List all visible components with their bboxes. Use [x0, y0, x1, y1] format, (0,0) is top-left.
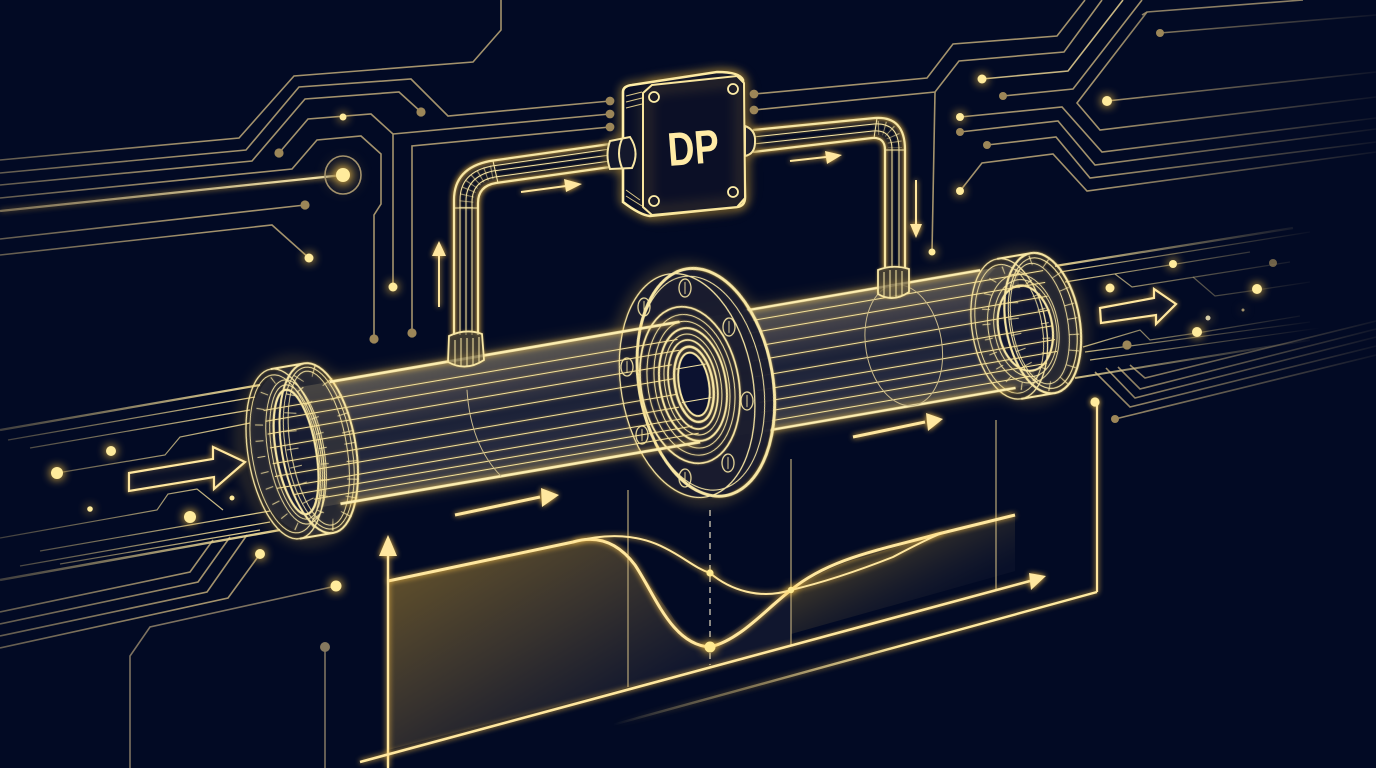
- left pipe lines: [261, 322, 700, 514]
- arrow: pipe flow right: [853, 413, 943, 437]
- curve points: [704, 569, 794, 652]
- arrow: down: [910, 180, 922, 238]
- left tap collar: [448, 331, 484, 367]
- chart right area fill: [791, 515, 1015, 634]
- right pipe lines: [744, 260, 1062, 431]
- left pipe edges: [320, 322, 700, 504]
- left impulse line: [448, 144, 610, 367]
- arrow: from transmitter: [790, 151, 842, 164]
- circuit traces: right: [754, 0, 1376, 419]
- left pipe section arc: [466, 387, 501, 480]
- pressure curve: [388, 515, 1015, 647]
- x axis: [360, 573, 1046, 762]
- flange hub rings: [628, 299, 752, 471]
- screws: [649, 84, 738, 206]
- left pipe longitudinal lines: [264, 339, 699, 505]
- right pipe longitudinal lines: [745, 271, 1060, 422]
- pressure chart: [360, 420, 1046, 768]
- central orifice flange: [586, 256, 791, 513]
- signal line: [612, 397, 1100, 725]
- halo behind pipe assembly: [228, 245, 1094, 550]
- inner face glow: [646, 80, 742, 212]
- bolt holes: [621, 279, 753, 487]
- arrow: to transmitter: [521, 179, 582, 192]
- bright nodes: [51, 74, 1262, 592]
- inlet connector: [608, 137, 636, 169]
- pipe extension flow lines: left: [0, 385, 280, 580]
- outlet arrow: [1100, 289, 1176, 324]
- highlighted trace node: [0, 156, 361, 211]
- outlet connector: [745, 126, 755, 156]
- right tap collar: [878, 267, 909, 298]
- dim nodes: [274, 29, 1277, 652]
- y axis: [379, 535, 397, 768]
- inlet arrow: [129, 447, 245, 491]
- chart guide lines: [628, 420, 996, 687]
- pipe extension flow lines: right: [1055, 228, 1320, 378]
- right impulse line: [753, 118, 909, 298]
- outlet ring: [961, 247, 1091, 405]
- arrow: up: [432, 241, 446, 307]
- DP transmitter: [608, 72, 755, 216]
- right pipe section ellipse: [856, 279, 952, 412]
- front face: [643, 76, 745, 215]
- chart area fill: [388, 539, 791, 750]
- DP label: DP: [666, 121, 721, 177]
- pipe flow arrows: [432, 151, 943, 515]
- housing: [623, 72, 745, 216]
- circuit traces: left: [0, 0, 610, 768]
- arrow: pipe flow left: [455, 488, 559, 515]
- pipe body section: [291, 264, 1036, 509]
- inlet ring: [234, 357, 370, 545]
- right pipe edges: [744, 268, 1016, 431]
- recovery curve: [573, 533, 942, 594]
